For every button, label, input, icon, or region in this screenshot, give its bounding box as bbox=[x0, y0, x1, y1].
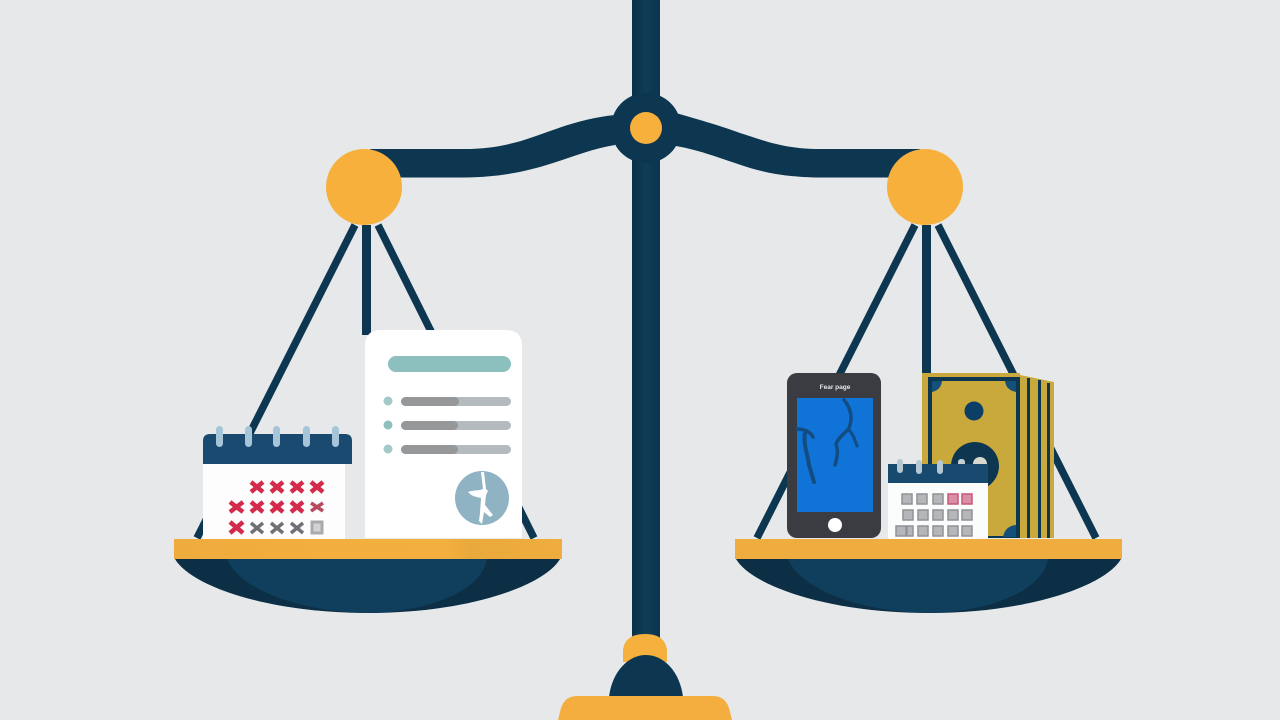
banknote stack bbox=[922, 373, 1054, 538]
calendar rings bbox=[216, 426, 339, 447]
calendar day marks bbox=[896, 494, 972, 536]
calendar rings bbox=[897, 459, 943, 474]
cracked phone bbox=[787, 373, 881, 538]
document card bbox=[365, 330, 522, 538]
home button bbox=[828, 518, 842, 532]
red day crosses bbox=[230, 482, 323, 533]
central post bbox=[632, 0, 660, 640]
right hanging strings bbox=[757, 225, 1096, 538]
left hanging strings bbox=[197, 225, 534, 538]
grey day crosses bbox=[251, 522, 322, 533]
pivot hub bbox=[611, 93, 681, 163]
document seal with figure bbox=[455, 471, 509, 525]
right beam bbox=[676, 113, 920, 178]
phone header text: Fear page bbox=[820, 384, 851, 391]
left pivot ball bbox=[326, 149, 402, 225]
list rows bbox=[384, 396, 511, 454]
left beam bbox=[370, 115, 615, 178]
document heading bar bbox=[388, 356, 511, 372]
base plate bbox=[558, 696, 732, 720]
front note bbox=[922, 373, 1020, 538]
left calendar bbox=[203, 426, 352, 539]
base dome bbox=[609, 655, 683, 697]
screen cracks bbox=[797, 400, 857, 482]
note edges bbox=[1027, 378, 1050, 538]
left pan bbox=[174, 539, 562, 613]
phone screen bbox=[797, 398, 873, 512]
right pan bbox=[735, 539, 1122, 613]
right calendar bbox=[888, 459, 988, 539]
right pivot ball bbox=[887, 149, 963, 225]
base knob bbox=[623, 634, 667, 662]
